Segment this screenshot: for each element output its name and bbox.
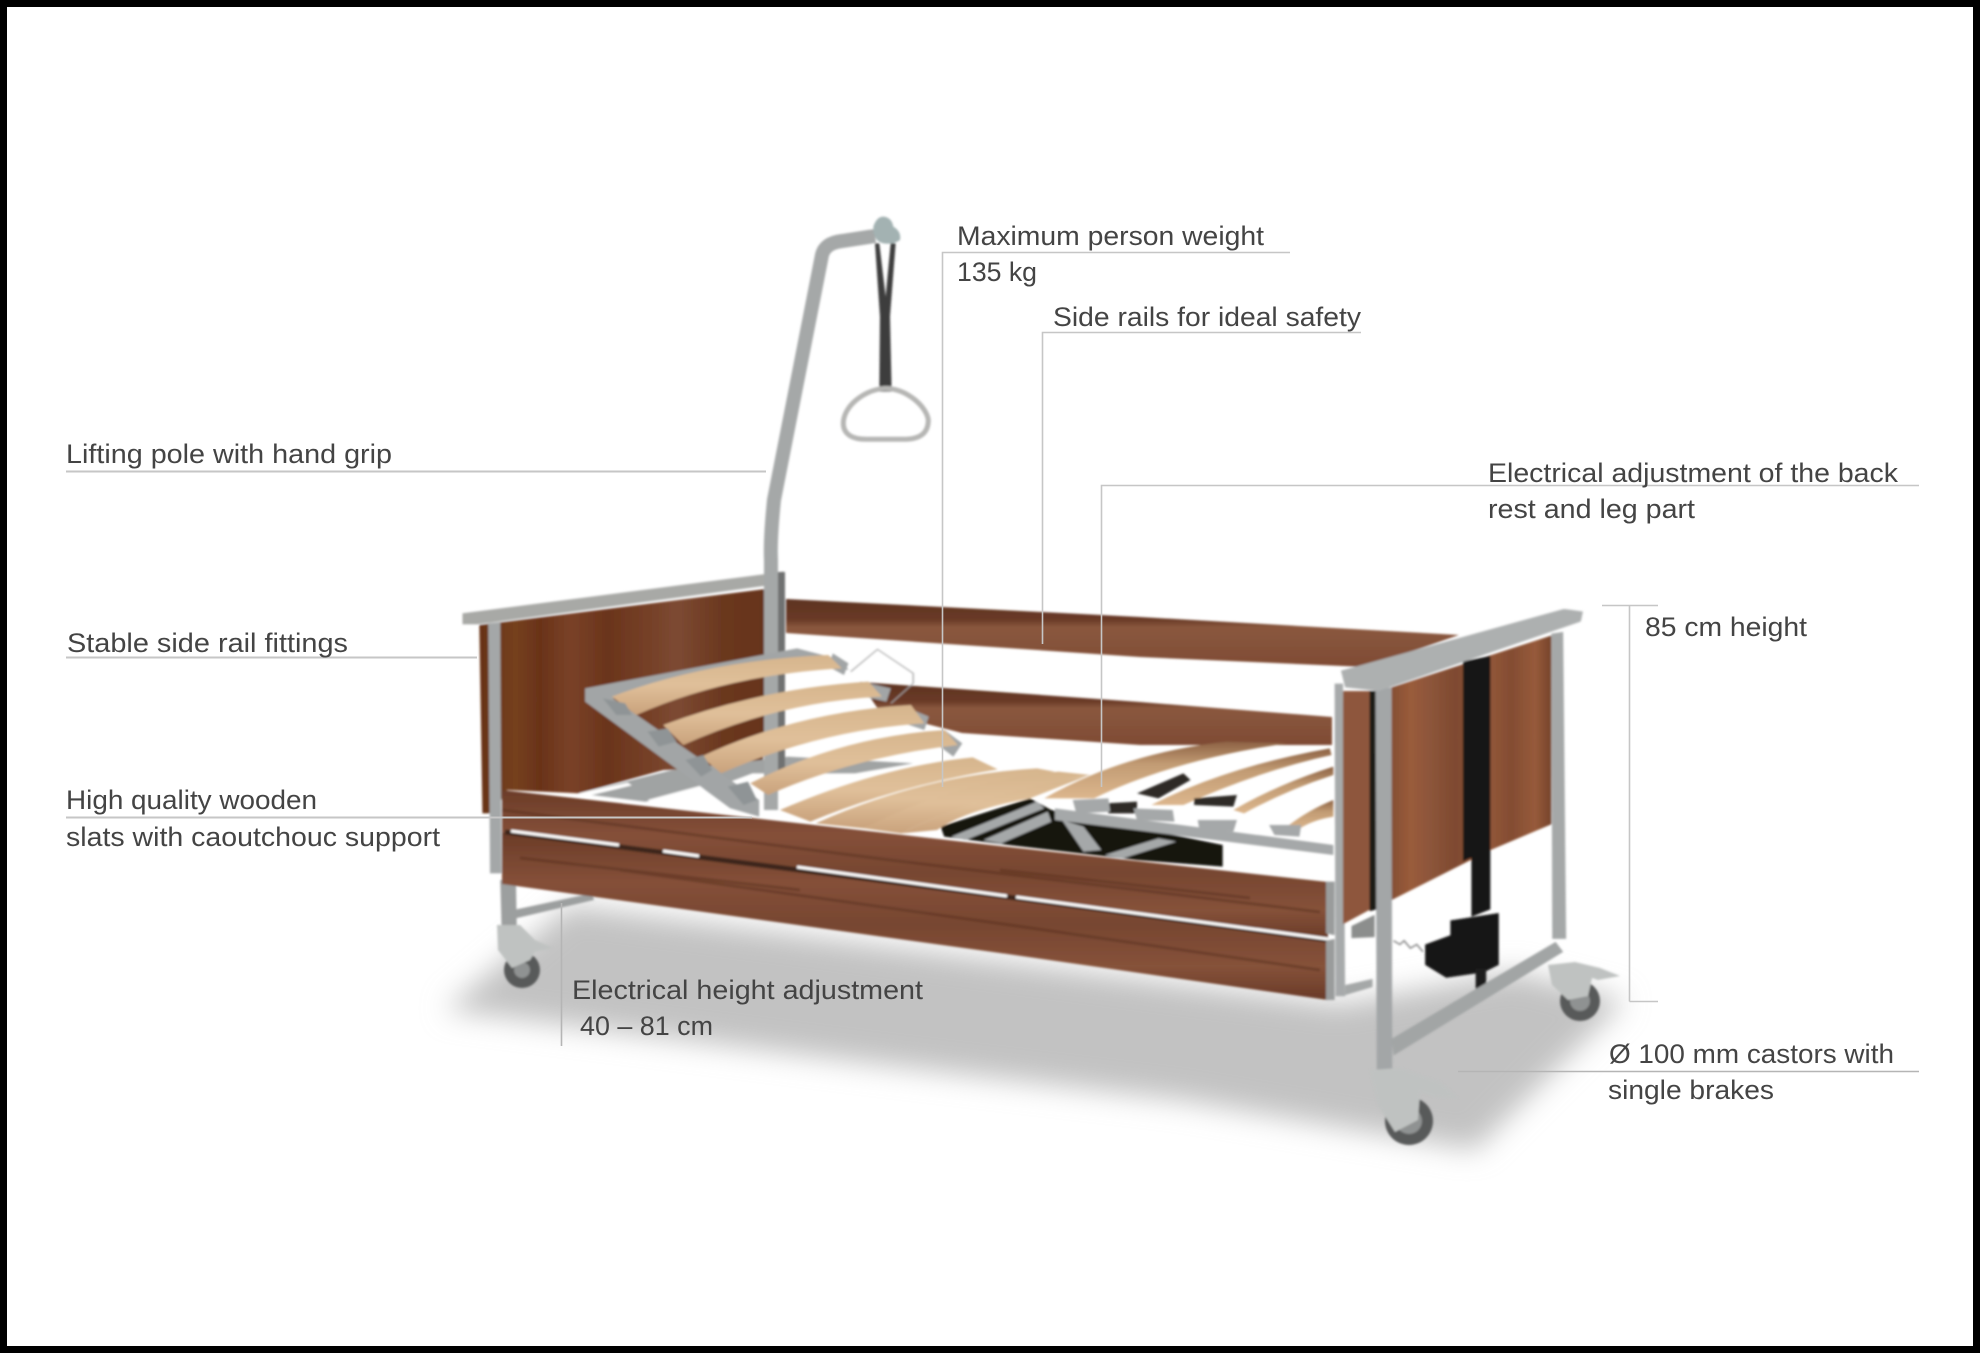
rail end caps [1326,882,1335,1000]
central slats and mechanism [780,742,1333,867]
leader line: lifting pole [66,470,766,472]
label: castors: Ø 100 mm castors with [1609,1039,1894,1069]
grip ring [843,388,928,439]
headboard wood panel [479,587,784,813]
floor shadow under bed [445,905,1625,1150]
grip mount [873,217,900,244]
headboard left post [488,622,502,873]
leader line: electrical adjustment [1102,486,1919,787]
foot lower strut [1391,942,1563,1055]
leader line: stable fittings [66,656,477,658]
rear side rail upper [786,599,1459,667]
dark under leg slats [1105,773,1237,813]
label: castors: single brakes [1608,1075,1774,1105]
rail gap white highlights [511,831,1328,939]
label: wooden slats: High quality wooden [66,785,317,815]
leader line: castors [1458,1070,1919,1072]
grip strap [875,243,896,392]
castor tyre [504,952,540,988]
panel bracket [1351,915,1375,938]
label: electrical back and leg adjustment: Electrical adjustment of the back [1488,458,1899,488]
front side rail upper [502,790,1328,940]
wire hanger detail [851,649,913,703]
actuator shaft [1476,968,1486,989]
left castor [497,925,553,988]
foot second post [1375,687,1392,1076]
white gaps in floor frame [578,783,708,803]
wood streaks [502,810,1320,970]
label: electrical height adjustment: Electrical height adjustment [572,975,924,1005]
label: height: 85 cm height [1645,612,1808,642]
spring cable [1394,941,1423,952]
label: electrical height adjustment [572,975,924,1041]
frame slat clips [603,698,757,805]
label: maximum person weight: Maximum person weight [957,221,1265,251]
castor fork and brake pedal [1370,1068,1458,1132]
rear side rail lower [860,682,1332,745]
foot small bracket [1345,979,1372,995]
foot panel left wood [1343,691,1370,924]
mechanism dark base [941,798,1223,867]
front castor [1370,1068,1458,1145]
castor tyre [1560,981,1600,1021]
pole hand grip [843,217,928,439]
headboard [462,572,913,930]
foot end [1326,609,1583,1076]
gray floor frame behind slats [578,757,913,802]
label: wooden slats: slats with caoutchouc support [66,822,441,852]
foot panel dark gap [1370,691,1377,911]
castor tyre [1385,1097,1433,1145]
leader line: side rails [1042,332,1361,644]
leader line: maximum weight [942,252,1290,787]
label: castors [1608,1039,1894,1105]
height bracket [1602,606,1658,1002]
leader line: wooden slats [66,816,752,818]
actuator motor [1425,913,1499,978]
label: electrical height adjustment: 40 – 81 cm [580,1011,713,1041]
label: wooden slats [66,785,441,852]
foot left post [1335,684,1345,996]
label: lifting pole: Lifting pole with hand grip [66,439,392,469]
headboard top rail [462,572,784,624]
actuator column [1463,656,1490,917]
label: side rails: Side rails for ideal safety [1053,302,1362,332]
slat frame [585,648,962,817]
foot top rail [1341,609,1583,691]
label: side rail fittings: Stable side rail fittings [67,628,348,658]
castor fork and brake pedal [497,925,553,968]
castor fork and brake pedal [1548,962,1620,1000]
lifting pole [771,236,875,810]
rail gap dark line [505,832,1328,940]
label: maximum person weight [957,221,1265,287]
pole shaded side [778,572,785,772]
foot panel wood [1391,636,1551,900]
label: maximum person weight: 135 kg [957,257,1037,287]
central slats [780,757,1091,833]
backrest slats and frame [585,648,962,817]
slats [612,655,958,795]
front side rail lower [502,832,1328,1000]
leader line: height adjustment [560,903,562,1046]
left leg and strut [500,880,594,930]
bed illustration [462,217,1620,1145]
mechanism frame bars [951,798,1333,858]
leg section slats [1044,742,1333,830]
rear castor [1548,962,1620,1021]
label: electrical back and leg adjustment: rest and leg part [1488,494,1696,524]
foot right post [1551,632,1566,939]
label: electrical back and leg adjustment [1488,458,1899,524]
